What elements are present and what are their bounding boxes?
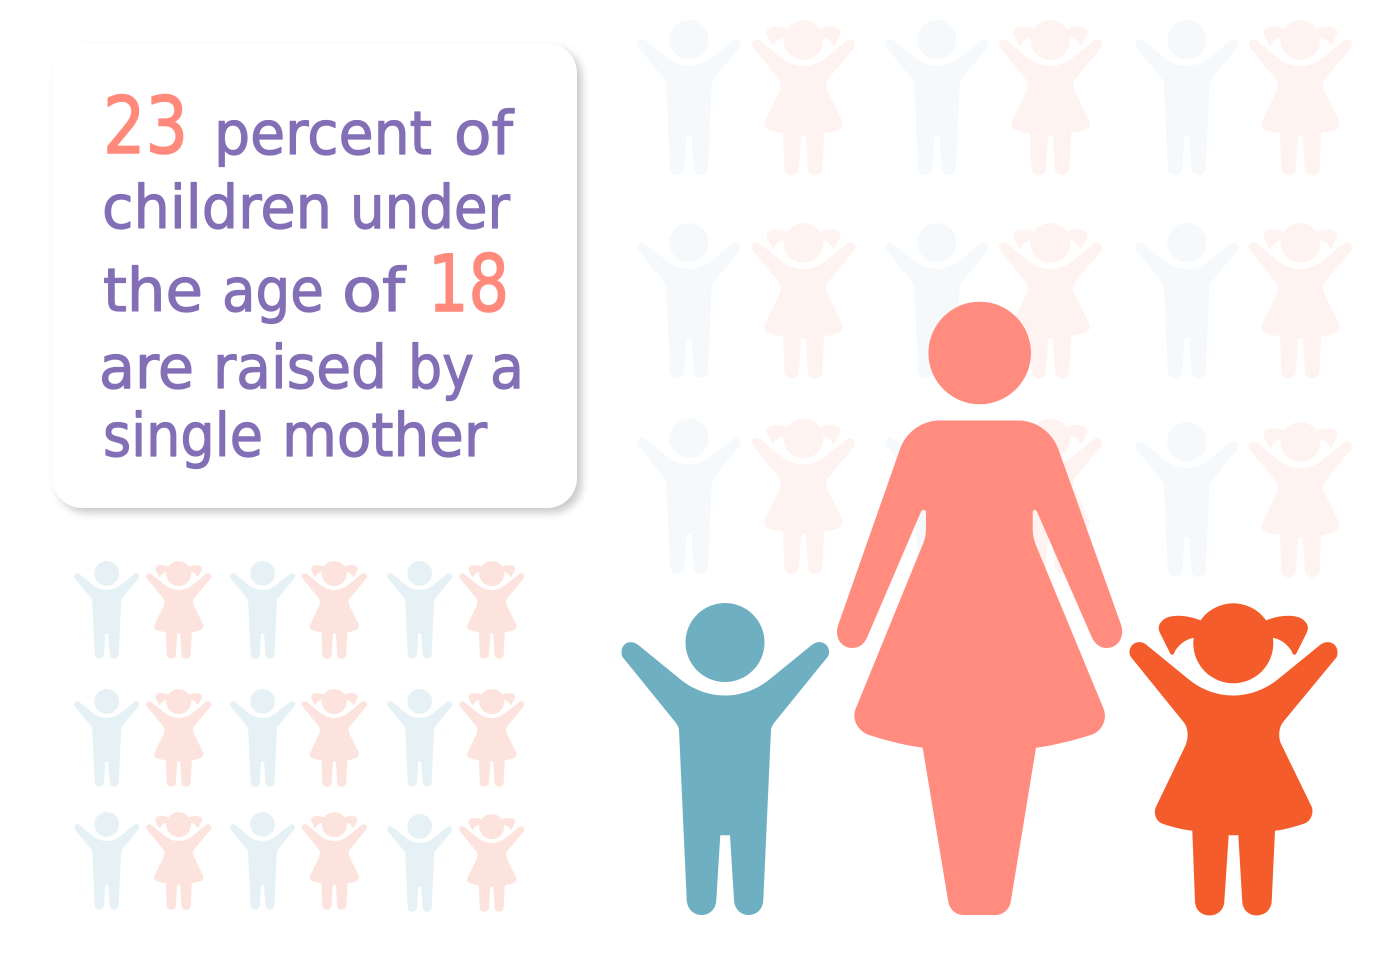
text: line 1: percent [214, 99, 432, 169]
icon: girl [1130, 603, 1338, 915]
icon: faint girl [999, 419, 1102, 574]
text: line 3 [103, 256, 407, 326]
icon: faint girl [1249, 20, 1352, 175]
icon: faint boy [1135, 20, 1238, 175]
icon: pale boy [230, 689, 295, 787]
text: line 4 [99, 333, 524, 403]
icon: mother [837, 302, 1122, 915]
background grid: faint children [638, 20, 1352, 577]
text: line 2: children [102, 173, 332, 243]
icon: faint girl [1249, 422, 1352, 577]
text: line 5: mother [282, 401, 487, 471]
icon: pale girl [302, 689, 367, 787]
icon: faint boy [1135, 422, 1238, 577]
icon: pale girl [459, 814, 524, 912]
icon: faint girl [1249, 223, 1352, 378]
text: line 2: under [350, 173, 510, 243]
icon: faint girl [752, 419, 855, 574]
text: line 4: are [99, 333, 194, 403]
icon: pale boy [387, 814, 452, 912]
text: line 3: of [342, 256, 407, 326]
icon: pale girl [302, 561, 367, 659]
icon: pale boy [74, 689, 139, 787]
icon: pale boy [230, 812, 295, 910]
icon: faint girl [752, 20, 855, 175]
icon: pale girl [146, 812, 211, 910]
panel: text card [52, 43, 577, 508]
text: line 1: of [454, 99, 515, 169]
icon: faint girl [999, 20, 1102, 175]
text: line 4: raised [213, 333, 387, 403]
text: line 5: single [103, 401, 263, 471]
icon: faint boy [886, 223, 989, 378]
icon: faint boy [886, 20, 989, 175]
icon: pale girl [146, 689, 211, 787]
number: 23: 23 [103, 82, 188, 172]
icon: boy [622, 603, 829, 915]
text: line 4: by [408, 333, 474, 403]
text: line 5 [103, 401, 487, 471]
icon: faint boy [638, 20, 741, 175]
icon: pale girl [459, 561, 524, 659]
icon: faint boy [638, 223, 741, 378]
small grid: pale children [74, 561, 524, 912]
icon: faint boy [1135, 223, 1238, 378]
text: line 3: the [103, 256, 203, 326]
icon: pale boy [230, 561, 295, 659]
icon: pale girl [459, 689, 524, 787]
icon: pale girl [302, 812, 367, 910]
icon: pale boy [74, 561, 139, 659]
icon: pale girl [146, 561, 211, 659]
icon: faint girl [752, 223, 855, 378]
icon: pale boy [387, 561, 452, 659]
icon: pale boy [387, 689, 452, 787]
text: line 4: a [490, 333, 524, 403]
text: line 3: age [222, 256, 324, 326]
icon: faint girl [999, 223, 1102, 378]
text: line 2 [102, 173, 510, 243]
icon: faint boy [886, 418, 989, 574]
icon: faint boy [638, 418, 741, 574]
icon: pale boy [74, 812, 139, 910]
statistic text [99, 82, 524, 471]
number: 18: 18 [428, 240, 509, 330]
